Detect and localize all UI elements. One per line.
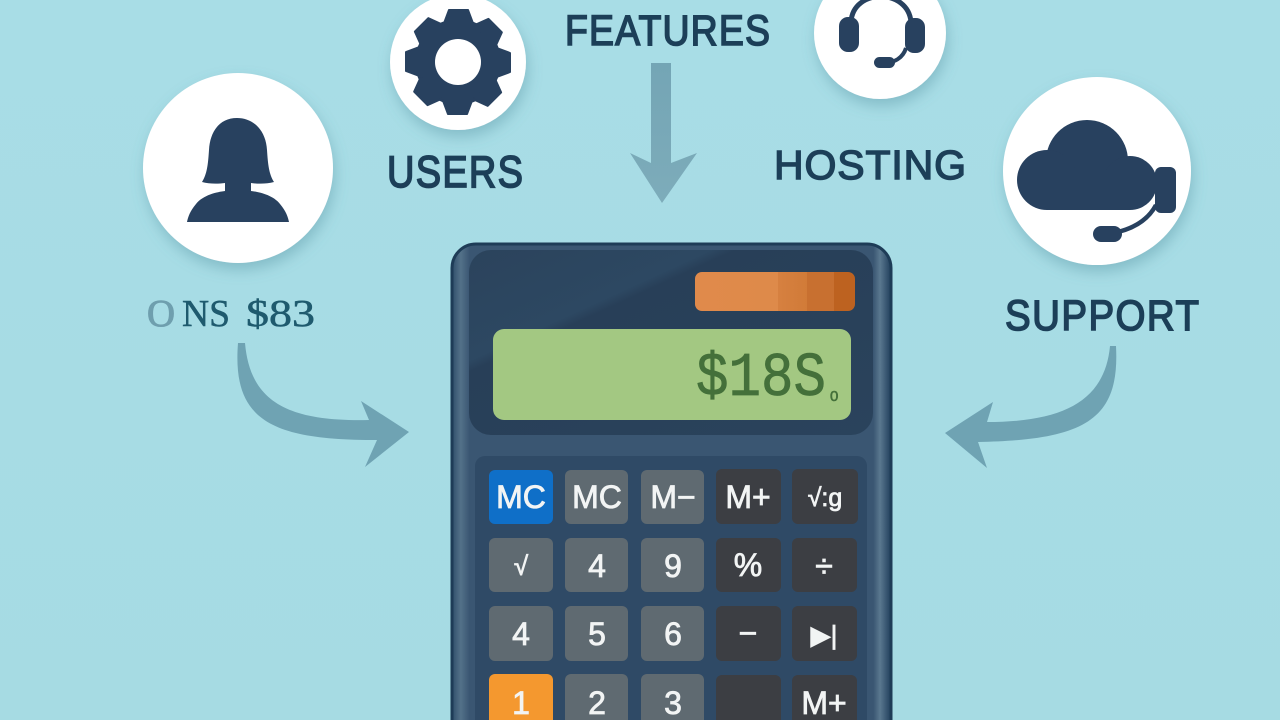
heading: users: USERS xyxy=(387,146,523,197)
display housing xyxy=(469,250,873,435)
label: garbled price xyxy=(147,293,315,335)
row 3 keys: ▶| xyxy=(811,620,837,650)
LCD display xyxy=(493,329,851,420)
calculator body xyxy=(452,244,891,720)
row 3 keys xyxy=(489,606,857,661)
row 1 keys: MC xyxy=(572,479,622,515)
row 2 keys: % xyxy=(734,547,762,583)
row 1 keys: MC xyxy=(496,479,546,515)
display value: 0 xyxy=(830,388,838,405)
row 2 keys: 4 xyxy=(588,548,606,584)
row 1 keys: M− xyxy=(650,479,696,515)
keypad xyxy=(475,456,867,720)
arrow: right curved xyxy=(945,346,1116,468)
row 2 keys: 9 xyxy=(664,548,682,584)
row 2 keys: ÷ xyxy=(815,548,833,584)
row 1 keys: M+ xyxy=(725,479,771,515)
row 3 keys: − xyxy=(739,615,757,651)
heading: support: SUPPORT xyxy=(1005,291,1199,339)
label: garbled price: $83 xyxy=(246,293,315,335)
label: garbled price: NS xyxy=(182,293,230,335)
heading: hosting: HOSTING xyxy=(774,142,966,188)
display value: $18S xyxy=(696,343,826,414)
icon: gear in circle xyxy=(390,0,526,130)
row 4 keys: M+ xyxy=(801,685,847,720)
arrow: down xyxy=(630,63,697,203)
row 1 keys xyxy=(489,469,858,524)
label: garbled price: O xyxy=(147,293,175,335)
calculator xyxy=(452,244,891,720)
row 3 keys: 5 xyxy=(588,616,606,652)
icon: person in circle xyxy=(143,73,333,263)
solar panel xyxy=(695,272,855,311)
icon: headset in circle xyxy=(814,0,946,99)
heading: features: FEATURES xyxy=(565,8,770,55)
row 3 keys: 4 xyxy=(512,616,530,652)
icon: cloud with headset in circle xyxy=(1003,77,1191,265)
row 2 keys xyxy=(489,538,857,592)
row 4 keys: 1 xyxy=(512,685,530,720)
row 4 keys: 3 xyxy=(664,685,682,720)
arrow: left curved xyxy=(237,343,409,467)
row 3 keys: 6 xyxy=(664,616,682,652)
row 1 keys: √:g xyxy=(808,484,842,512)
row 2 keys: √ xyxy=(514,551,529,581)
row 4 keys: 2 xyxy=(588,685,606,720)
row 4 keys xyxy=(489,674,857,720)
